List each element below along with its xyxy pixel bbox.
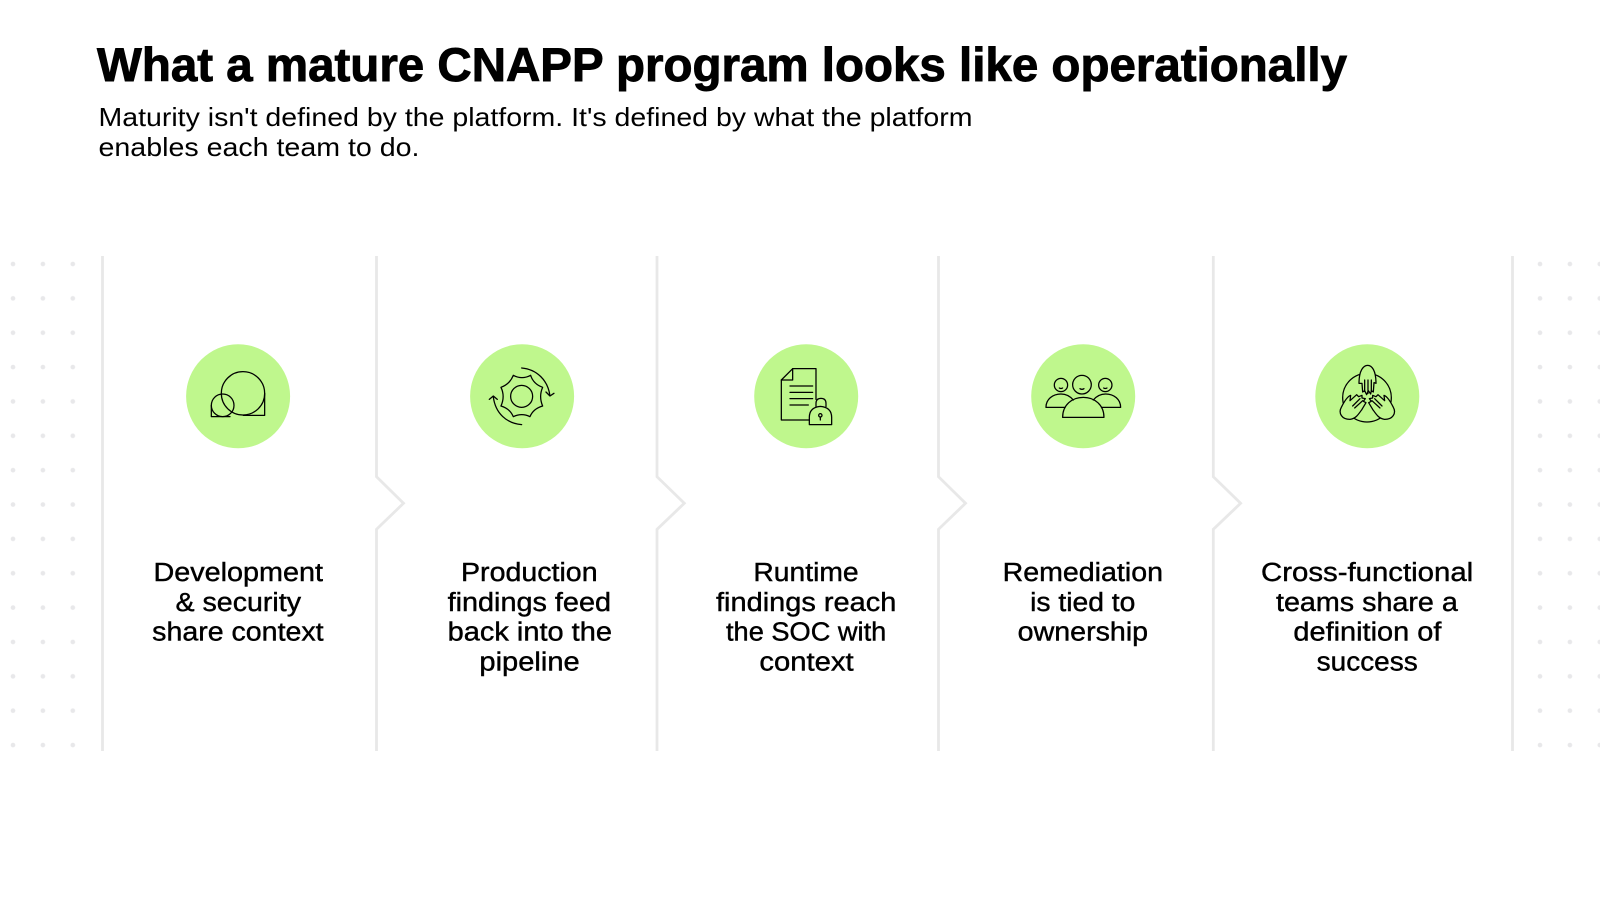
text: remediation: is tied to bbox=[1030, 589, 1135, 617]
text: production findings: findings feed bbox=[448, 589, 611, 617]
text: remediation bbox=[1003, 559, 1163, 647]
text: runtime findings: Runtime bbox=[753, 559, 859, 587]
text: cross-functional teams: success bbox=[1317, 648, 1418, 676]
subtitle: Maturity isn't defined by the platform. It's defined by what the platform bbox=[98, 102, 972, 132]
text: runtime findings: the SOC with bbox=[726, 619, 886, 647]
text: production findings: pipeline bbox=[479, 648, 580, 676]
icon: gear with cycle arrows bbox=[470, 344, 574, 448]
text: cross-functional teams: teams share a bbox=[1276, 589, 1459, 617]
text: production findings bbox=[448, 559, 612, 676]
text: remediation: ownership bbox=[1018, 619, 1148, 647]
step dividers with chevrons bbox=[102, 256, 1512, 751]
panel: remediation bbox=[1003, 344, 1163, 647]
text: cross-functional teams: definition of bbox=[1293, 619, 1442, 647]
title: What a mature CNAPP program looks like operationally bbox=[97, 38, 1347, 91]
text: cross-functional teams: Cross-functional bbox=[1261, 559, 1473, 587]
text: runtime findings: context bbox=[759, 648, 854, 676]
text: runtime findings bbox=[716, 559, 896, 676]
text: remediation: Remediation bbox=[1003, 559, 1163, 587]
text: production findings: back into the bbox=[448, 619, 612, 647]
subtitle: enables each team to do. bbox=[98, 132, 420, 162]
subtitle bbox=[98, 102, 972, 162]
text: production findings: Production bbox=[461, 559, 598, 587]
text: development and security: & security bbox=[176, 589, 301, 617]
panel: development and security bbox=[152, 344, 324, 647]
icon: three joined hands bbox=[1315, 344, 1419, 448]
icon: overlapping circles bbox=[186, 344, 290, 448]
icon: document with padlock bbox=[754, 344, 858, 448]
text: runtime findings: findings reach bbox=[716, 589, 896, 617]
panel: runtime findings bbox=[716, 344, 896, 676]
text: development and security: share context bbox=[152, 619, 324, 647]
text: cross-functional teams bbox=[1261, 559, 1473, 676]
icon: three people bbox=[1031, 344, 1135, 448]
panel: production findings bbox=[448, 344, 612, 676]
panel: cross-functional teams bbox=[1261, 344, 1473, 676]
text: development and security bbox=[152, 559, 324, 647]
text: development and security: Development bbox=[154, 559, 323, 587]
